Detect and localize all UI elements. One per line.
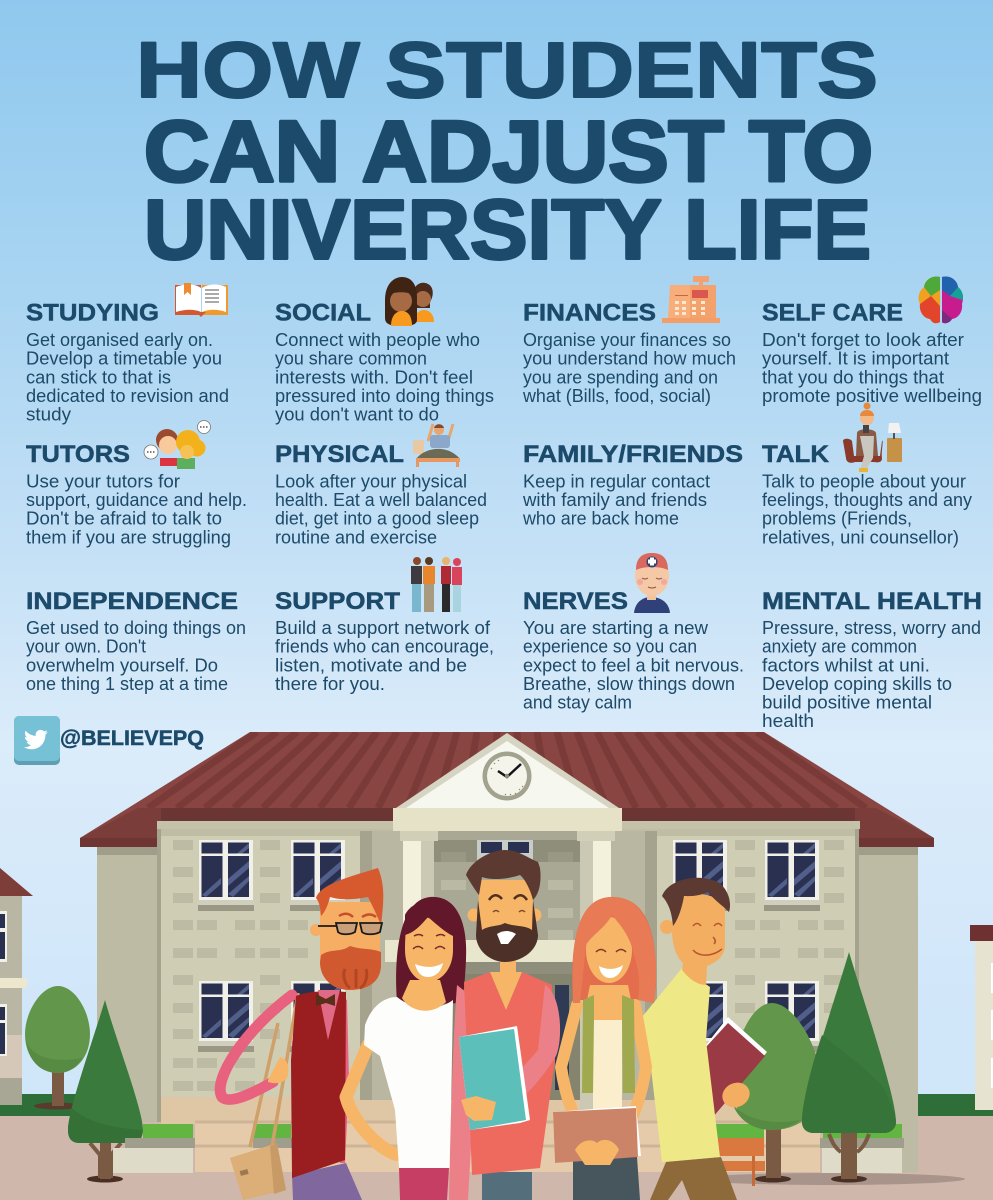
right conifer bbox=[802, 952, 896, 1182]
panel: mental health bbox=[762, 588, 982, 731]
panel: family and friends bbox=[522, 441, 743, 529]
icon: dark red book bbox=[706, 1017, 767, 1117]
heading: FINANCES bbox=[523, 300, 656, 326]
icon: twitter bird bbox=[14, 716, 60, 765]
icon: open book bbox=[175, 283, 228, 317]
text block bbox=[523, 617, 744, 713]
title bbox=[136, 25, 878, 276]
student: woman in white t-shirt bbox=[346, 897, 466, 1200]
text block: health. Eat a well balanced bbox=[275, 489, 487, 510]
heading: STUDYING bbox=[26, 300, 159, 326]
title: CAN ADJUST TO bbox=[144, 104, 873, 200]
title: UNIVERSITY LIFE bbox=[144, 182, 871, 276]
student: man in yellow shirt bbox=[642, 878, 767, 1200]
left round tree bbox=[25, 986, 90, 1110]
text block: what (Bills, food, social) bbox=[522, 385, 711, 406]
student: woman with red hair and folder bbox=[553, 897, 656, 1200]
text block: feelings, thoughts and any bbox=[762, 489, 973, 510]
text block: factors whilst at uni. bbox=[762, 654, 930, 675]
text block: you don't want to do bbox=[275, 404, 439, 425]
text block: pressured into doing things bbox=[275, 385, 494, 406]
text block bbox=[26, 329, 229, 425]
heading: MENTAL HEALTH bbox=[762, 588, 982, 615]
text block: there for you. bbox=[275, 673, 385, 694]
heading: SOCIAL bbox=[275, 300, 371, 326]
icon: two students bbox=[385, 277, 434, 326]
twitter handle bbox=[14, 716, 204, 765]
wings and wall bbox=[97, 847, 157, 1122]
text block: dedicated to revision and bbox=[26, 385, 229, 406]
heading: NERVES bbox=[523, 588, 628, 615]
text block: Connect with people who bbox=[275, 329, 480, 350]
text block: health bbox=[762, 710, 814, 731]
right round tree bbox=[732, 1003, 821, 1182]
text block bbox=[762, 617, 981, 731]
icon: group of friends bbox=[411, 557, 462, 612]
text block: you understand how much bbox=[523, 348, 736, 369]
text block bbox=[762, 470, 973, 547]
text block: Use your tutors for bbox=[26, 470, 180, 491]
text block: Develop coping skills to bbox=[762, 673, 952, 694]
text block bbox=[275, 617, 494, 694]
text block: who are back home bbox=[522, 508, 679, 529]
text block: Talk to people about your bbox=[762, 470, 966, 491]
right planter, hedge and bench bbox=[695, 1124, 965, 1186]
text block: Breathe, slow things down bbox=[523, 673, 735, 694]
icon: clock bbox=[482, 752, 532, 800]
icon: teal book bbox=[459, 1026, 530, 1130]
left neighbouring building bbox=[0, 868, 33, 1105]
heading: FAMILY/FRIENDS bbox=[523, 441, 743, 468]
text block: that you do things that bbox=[762, 366, 945, 387]
text block: can stick to that is bbox=[26, 366, 171, 387]
text block: yourself. It is important bbox=[762, 348, 950, 369]
text block: Organise your finances so bbox=[523, 329, 731, 350]
icon: tutor and student talking bbox=[144, 420, 210, 469]
right neighbouring building bbox=[970, 925, 993, 1110]
roof bbox=[80, 732, 934, 847]
text block: them if you are struggling bbox=[26, 526, 231, 547]
text block: and stay calm bbox=[523, 692, 632, 713]
text block: routine and exercise bbox=[275, 526, 437, 547]
text block: anxiety are common bbox=[762, 636, 917, 657]
text block: study bbox=[26, 404, 72, 425]
text block: with family and friends bbox=[522, 489, 707, 510]
panel: self care bbox=[762, 277, 982, 406]
icon: calm head with medical cross bbox=[634, 553, 670, 613]
student: bearded man with teal book bbox=[449, 850, 560, 1200]
left conifer bbox=[68, 1000, 143, 1182]
text block: promote positive wellbeing bbox=[762, 385, 982, 406]
text block: Develop a timetable you bbox=[26, 348, 222, 369]
text block: you share common bbox=[275, 348, 427, 369]
pediment bbox=[393, 733, 622, 810]
panel: physical bbox=[275, 424, 487, 547]
text block bbox=[762, 329, 982, 406]
text block: diet, get into a good sleep bbox=[275, 508, 479, 529]
text block: support, guidance and help. bbox=[26, 489, 247, 510]
text block: experience so you can bbox=[523, 636, 697, 657]
text block: friends who can encourage, bbox=[275, 636, 494, 657]
text block: you are spending and on bbox=[523, 366, 718, 387]
text block: Get used to doing things on bbox=[26, 617, 246, 638]
text block: relatives, uni counsellor) bbox=[762, 526, 959, 547]
icon: woman in armchair with lamp bbox=[843, 402, 902, 472]
heading: TUTORS bbox=[26, 441, 130, 468]
text block: You are starting a new bbox=[523, 617, 708, 638]
heading: PHYSICAL bbox=[275, 441, 404, 468]
text block: overwhelm yourself. Do bbox=[26, 654, 218, 675]
text block bbox=[522, 470, 711, 529]
text block: Get organised early on. bbox=[26, 329, 213, 350]
text block: your own. Don't bbox=[26, 636, 147, 657]
panel: talk bbox=[762, 402, 973, 547]
icon: cash register bbox=[662, 276, 720, 323]
text block: listen, motivate and be bbox=[275, 654, 467, 675]
student: hipster man with red beard bbox=[220, 868, 383, 1200]
text block: Pressure, stress, worry and bbox=[762, 617, 981, 638]
wall bricks bbox=[106, 840, 910, 1091]
text block: Look after your physical bbox=[275, 470, 467, 491]
text block: expect to feel a bit nervous. bbox=[523, 654, 744, 675]
central portico bbox=[360, 831, 372, 1100]
icon: colourful brain bbox=[919, 277, 963, 323]
ground and hedges bbox=[0, 1094, 993, 1200]
text block bbox=[275, 329, 494, 425]
heading: SELF CARE bbox=[762, 300, 903, 326]
panel: support bbox=[275, 557, 494, 694]
text block bbox=[522, 329, 736, 406]
icon: person waking in bed bbox=[413, 424, 460, 467]
heading: TALK bbox=[762, 441, 829, 468]
windows bbox=[198, 840, 254, 911]
title: HOW STUDENTS bbox=[136, 25, 878, 114]
panel: studying bbox=[26, 283, 229, 425]
heading: SUPPORT bbox=[275, 588, 400, 615]
panel: tutors bbox=[26, 420, 247, 547]
university building bbox=[80, 732, 934, 1172]
text block bbox=[26, 617, 246, 694]
panel: social bbox=[275, 277, 494, 425]
text block: Don't be afraid to talk to bbox=[26, 508, 222, 529]
text block bbox=[26, 470, 247, 547]
icon: brown folder bbox=[553, 1106, 641, 1163]
text block bbox=[275, 470, 487, 547]
handle text: @BELIEVEPQ bbox=[60, 727, 204, 750]
text block: Build a support network of bbox=[275, 617, 491, 638]
text block: problems (Friends, bbox=[762, 508, 912, 529]
left planter and hedge bbox=[113, 1124, 293, 1173]
panel: independence bbox=[26, 588, 246, 694]
heading: INDEPENDENCE bbox=[26, 588, 238, 615]
text block: Don't forget to look after bbox=[762, 329, 964, 350]
text block: build positive mental bbox=[762, 692, 932, 713]
panel: finances bbox=[522, 276, 736, 406]
text block: Keep in regular contact bbox=[523, 470, 711, 491]
shoulder bag bbox=[230, 993, 298, 1200]
panel: nerves bbox=[523, 553, 744, 713]
text block: one thing 1 step at a time bbox=[26, 673, 228, 694]
text block: interests with. Don't feel bbox=[275, 366, 473, 387]
